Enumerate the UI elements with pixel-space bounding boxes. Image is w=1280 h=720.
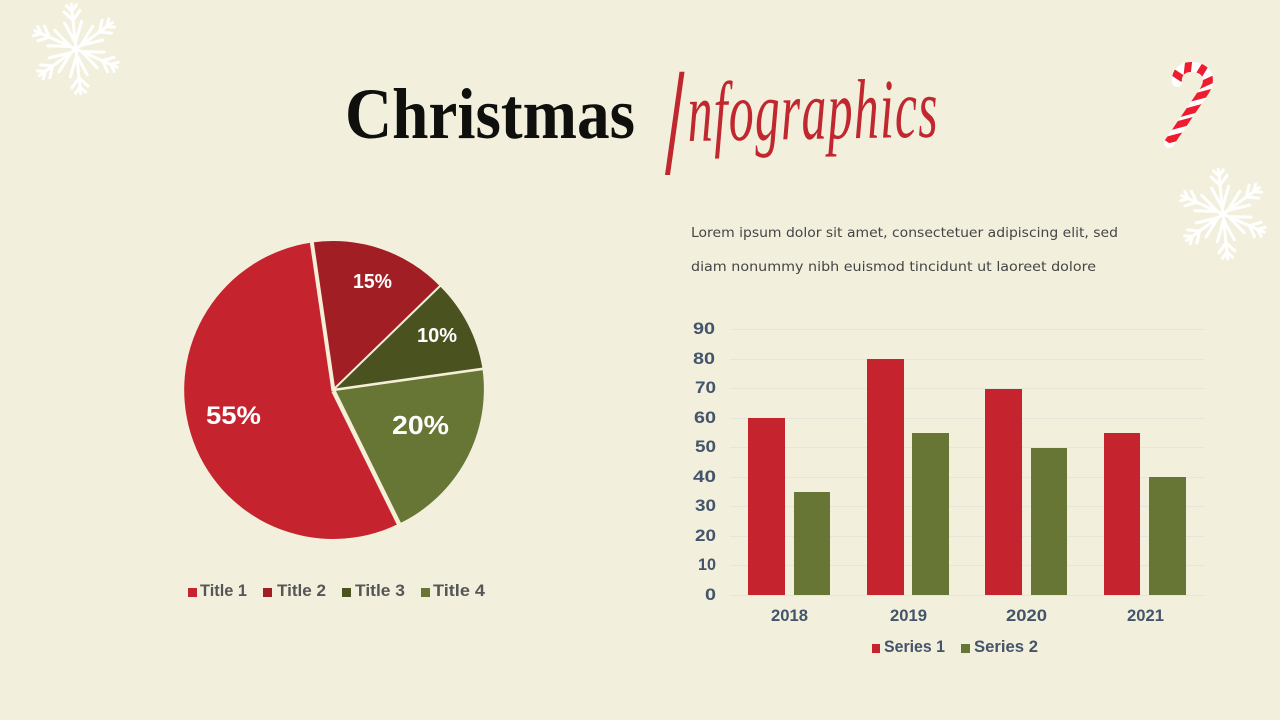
- gridlines: [730, 330, 1205, 596]
- pie legend: [188, 581, 486, 600]
- title word: Christmas: Christmas: [345, 74, 635, 154]
- bar legend: Series 2: [974, 637, 1038, 656]
- pie labels: 55%: [206, 402, 261, 430]
- y axis labels: 0: [705, 586, 716, 604]
- x axis labels: [771, 607, 1164, 625]
- x axis labels: 2020: [1006, 607, 1047, 625]
- series 2 bars: [794, 433, 1186, 595]
- pie chart: [184, 240, 484, 539]
- y axis labels: 90: [693, 320, 715, 338]
- y axis labels: 40: [693, 468, 716, 486]
- slice: Title 4 20%: [333, 369, 484, 524]
- pie legend: Title 1: [200, 581, 247, 600]
- icon: candy cane: [1164, 62, 1213, 148]
- title: [345, 40, 938, 208]
- text block: Lorem ipsum dolor sit amet, consectetuer adipiscing elit, sed: [691, 225, 1118, 241]
- text block: [691, 225, 1118, 275]
- slice: Title 1 55%: [184, 242, 399, 539]
- pie labels: 15%: [353, 271, 392, 293]
- pie legend: Title 4: [433, 581, 486, 600]
- slice: Title 3 10%: [333, 286, 482, 390]
- title word: Infographics: [655, 40, 938, 208]
- title word: Infographics: nfographics: [687, 62, 938, 161]
- x axis labels: 2019: [890, 607, 927, 625]
- series 1 bars: [748, 359, 1140, 595]
- y axis labels: [693, 320, 716, 604]
- y axis labels: 80: [693, 350, 715, 368]
- pie labels: 20%: [392, 410, 449, 440]
- pie labels: 10%: [417, 325, 457, 347]
- y axis labels: 60: [694, 409, 716, 427]
- icon: snowflake right: [1175, 165, 1271, 263]
- y axis labels: 10: [698, 556, 716, 574]
- y axis labels: 30: [695, 497, 716, 515]
- y axis labels: 50: [695, 438, 716, 456]
- pie legend: Title 2: [277, 581, 326, 600]
- icon: snowflake top left: [28, 0, 124, 98]
- bar legend: [872, 637, 1038, 656]
- y axis labels: 20: [695, 527, 716, 545]
- title word: Infographics: I: [655, 40, 694, 208]
- y axis labels: 70: [695, 379, 716, 397]
- text block: diam nonummy nibh euismod tincidunt ut laoreet dolore: [691, 259, 1096, 275]
- pie legend: Title 3: [355, 581, 405, 600]
- bar chart: [693, 320, 1205, 656]
- x axis labels: 2018: [771, 607, 808, 625]
- slice: Title 2 15%: [312, 241, 440, 390]
- pie labels: [206, 271, 457, 440]
- x axis labels: 2021: [1127, 607, 1164, 625]
- bar legend: Series 1: [884, 637, 945, 656]
